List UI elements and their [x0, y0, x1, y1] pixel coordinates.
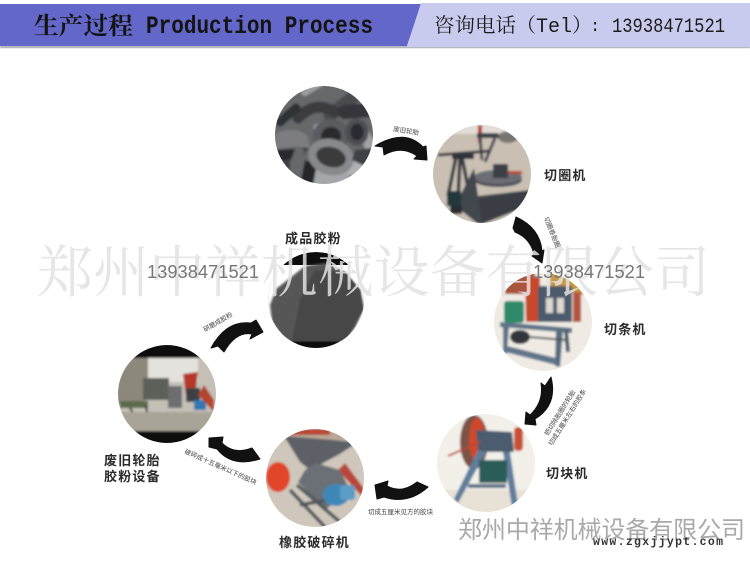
watermark: company name bottom: 郑州中祥机械设备有限公司: [458, 517, 745, 544]
label: finished rubber powder: 成品胶粉: [285, 231, 342, 246]
photo: block cutter machine: [437, 414, 535, 512]
photo: waste tires: [275, 86, 373, 184]
phone contact: （Tel）: [516, 15, 592, 39]
label: tire rubber powder equipment: 胶粉设备: [104, 469, 161, 484]
photo: rubber crusher: [264, 428, 369, 528]
photo: production line: [118, 345, 216, 443]
watermark: phone left: 13938471521: [147, 261, 259, 282]
label: tire rubber powder equipment: [104, 453, 161, 484]
phone contact: 13938471521: [612, 16, 725, 39]
label: tire rubber powder equipment: 废旧轮胎: [104, 453, 161, 468]
caption: ground into powder: 研磨成胶粉: [202, 309, 235, 334]
arrow: tires to ring cutter: [375, 137, 427, 160]
title: Production Process: [146, 12, 373, 41]
arrow: production line to powder: [211, 320, 263, 352]
watermark: phone right: 13938471521: [533, 261, 645, 282]
arrow: ring cutter to strip cutter: [513, 217, 544, 263]
website url: www.zgxjjypt.com: [593, 536, 723, 549]
phone contact: [434, 14, 725, 39]
caption: waste tires: 废旧轮胎: [393, 124, 420, 137]
photo: ring cutter machine: [433, 125, 531, 223]
arrow: block cutter to crusher: [375, 481, 428, 499]
caption: five centimetre blocks: 切成五厘米见方的胶块: [368, 507, 434, 516]
arrow: crusher to production line: [209, 437, 260, 462]
photo: strip cutter machine: [494, 273, 592, 371]
caption: crushed to fifteen millimetres: 破碎成十五毫米以下的胶块: [183, 447, 259, 487]
arrow: strip cutter to block cutter: [525, 377, 553, 425]
title: [34, 12, 373, 41]
header banner: [0, 3, 750, 48]
header right band: [407, 3, 750, 47]
caption: ring cutting: 切圈卷胎圈: [542, 215, 563, 249]
caption: cut strips: 切成五厘米左右的胶条: [546, 387, 588, 447]
phone contact: 咨询电话: [434, 14, 516, 37]
phone contact: :: [590, 18, 600, 37]
label: rubber crusher: 橡胶破碎机: [279, 535, 350, 550]
label: ring cutter: 切圈机: [544, 168, 587, 183]
caption: cut strips: 把切除胎圈的轮胎: [542, 388, 578, 437]
label: strip cutter: 切条机: [604, 322, 647, 337]
label: block cutter: 切块机: [546, 466, 589, 481]
watermark: company name large: 郑州中祥机械设备有限公司: [37, 243, 710, 305]
photo: finished rubber powder: [268, 252, 364, 348]
title: 生产过程: [34, 13, 133, 40]
header left band: [0, 4, 421, 46]
